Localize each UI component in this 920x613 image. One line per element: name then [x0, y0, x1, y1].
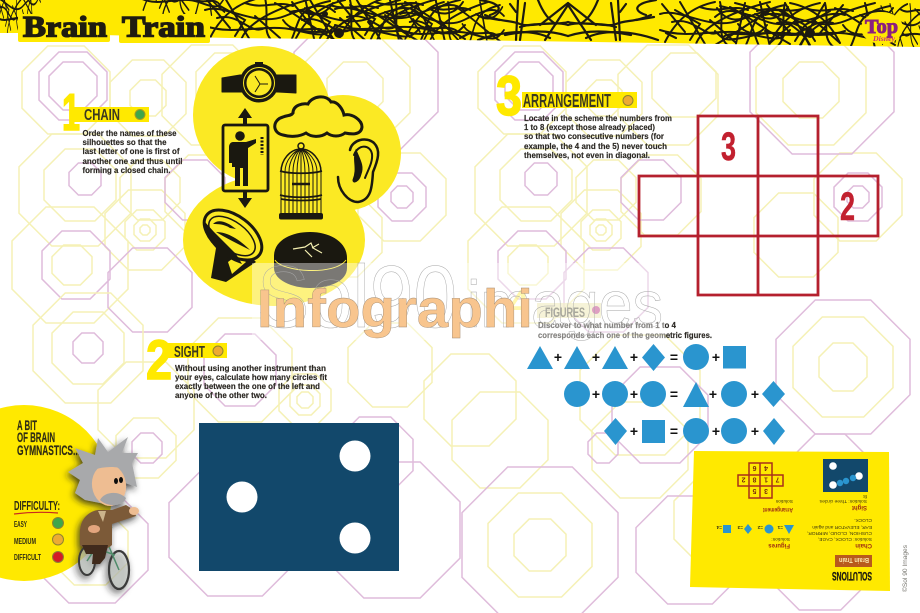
- chain instructions: last letter of one is first of: [82, 146, 180, 156]
- copyright: ©Sol 90 Images: [901, 544, 909, 592]
- icon: cloud: [275, 97, 362, 136]
- sight solution: [819, 459, 868, 510]
- chain instructions: Order the names of these: [82, 128, 177, 138]
- panel: upside-down solutions: [690, 451, 890, 591]
- arrangement solution: Arrangement: [763, 506, 793, 512]
- chain instructions: [82, 128, 182, 175]
- difficulty legend: EASY: [14, 520, 27, 529]
- header band with scribbles: [0, 0, 920, 49]
- chain solution: Chain: [855, 542, 872, 548]
- arrangement solution: 6: [752, 464, 756, 471]
- heading bar: arrangement: ARRANGEMENT: [523, 91, 611, 111]
- sight puzzle: blue panel with circles: [199, 423, 399, 571]
- grid number 2: 2: [840, 185, 855, 229]
- equation row 1: +: [592, 349, 600, 365]
- equation row 1: +: [554, 349, 562, 365]
- number 3: 3: [496, 64, 522, 127]
- arrangement solution: 7: [775, 476, 779, 482]
- arrangement instructions: [524, 113, 672, 160]
- chain solution: CLOCK.: [854, 517, 872, 523]
- arrangement solution: Solution: [775, 498, 793, 504]
- yellow blob behind silhouettes: [183, 46, 401, 306]
- character: Einstein on a bicycle: [68, 437, 139, 589]
- watermark: Infographi: [257, 279, 533, 339]
- equation row 3: =: [670, 423, 678, 439]
- icon: wristwatch: [222, 62, 296, 102]
- arrangement solution: 3: [764, 487, 768, 494]
- arrangement solution: 4: [764, 464, 768, 471]
- equation row 1: =: [670, 349, 678, 365]
- equation row 1: +: [712, 349, 720, 365]
- figures instructions: corresponds each one of the geometric figures.: [538, 330, 712, 340]
- logo: Top Disney: [861, 12, 903, 44]
- panel: sight heading and text: [146, 328, 327, 400]
- brain train label: [835, 555, 872, 567]
- grid number 3: 3: [721, 125, 736, 169]
- difficulty legend: MEDIUM: [14, 537, 36, 546]
- arrangement solution: 5: [752, 487, 756, 494]
- side title: GYMNASTICS...: [17, 442, 80, 458]
- equation row 3: +: [712, 423, 720, 439]
- figures solution: [716, 524, 794, 548]
- equation row 3: [604, 418, 785, 445]
- heading bar: figures: FIGURES: [545, 304, 585, 320]
- equation row 3: +: [751, 423, 759, 439]
- brain train label: Brain Train: [839, 556, 869, 565]
- equation row 2: +: [709, 386, 717, 402]
- equation row 3: +: [630, 423, 638, 439]
- arrangement instructions: so that two consecutive numbers (for: [524, 131, 665, 141]
- sight instructions: your eyes, calculate how many circles fit: [175, 372, 327, 382]
- side title: OF BRAIN: [17, 429, 55, 445]
- background octagon pattern: [12, 10, 446, 332]
- sight instructions: Without using another instrument than: [175, 363, 326, 373]
- equation row 2: [564, 381, 785, 407]
- watermark: [252, 247, 665, 346]
- figures solution: =4: [716, 524, 722, 530]
- title: Brain: [23, 10, 107, 44]
- icon: mirror: [195, 200, 271, 282]
- figures solution: Figures: [768, 542, 790, 548]
- logo: Top Disney: Disney: [872, 34, 896, 43]
- number 2: 2: [146, 328, 172, 391]
- sight instructions: exactly between the one of the left and: [175, 381, 320, 391]
- arrangement instructions: themselves, not even in diagonal.: [524, 150, 650, 160]
- equation row 1: [527, 344, 746, 371]
- heading bar: sight: SIGHT: [174, 344, 205, 361]
- difficulty legend: DIFFICULTY:: [14, 498, 60, 513]
- difficulty legend: [14, 498, 64, 562]
- panel: figures heading and text: [509, 282, 712, 340]
- chain instructions: forming a closed chain.: [82, 165, 170, 175]
- sight instructions: anyone of the other two.: [175, 390, 267, 400]
- figures puzzle equations: [527, 344, 785, 445]
- watermark: Sol90: [257, 247, 457, 346]
- sight instructions: [175, 363, 327, 400]
- logo: Top Disney: Top: [865, 16, 898, 38]
- watermark: images: [467, 267, 663, 341]
- arrangement solution: 1: [764, 476, 768, 482]
- number 4, washed out: 4: [509, 282, 529, 323]
- sight solution: Sight: [852, 504, 867, 510]
- figures instructions: [538, 320, 712, 340]
- arrangement solution: 8: [752, 476, 756, 482]
- arrangement instructions: Locate in the scheme the numbers from: [524, 113, 672, 123]
- icon: elevator: [223, 108, 268, 208]
- difficulty legend: DIFFICULT: [14, 553, 41, 562]
- chain instructions: another one and thus until: [82, 156, 182, 166]
- equation row 2: +: [630, 386, 638, 402]
- figures solution: Solution:: [771, 536, 790, 542]
- title: Train: [122, 10, 205, 44]
- icon: birdcage: [279, 143, 323, 220]
- side title: [17, 417, 80, 458]
- equation row 2: +: [751, 386, 759, 402]
- chain solution: EAR, ELEVATOR and again: [812, 524, 872, 530]
- chain solution: [807, 517, 872, 548]
- number 1: 1: [62, 84, 80, 142]
- number grid: [639, 116, 878, 295]
- figures instructions: Discover to what number from 1 to 4: [538, 320, 676, 330]
- arrangement instructions: 1 to 8 (except those already placed): [524, 122, 655, 132]
- solutions heading: SOLUTIONS: [832, 569, 872, 583]
- side title: A BIT: [17, 417, 37, 433]
- figures solution: =3: [737, 524, 743, 530]
- yellow circle: gymnastics and difficulty legend: [0, 405, 112, 581]
- figures solution: =1: [777, 524, 783, 530]
- panel: arrangement heading and text: [496, 64, 672, 160]
- icon: hockey puck cushion: [274, 232, 347, 288]
- equation row 1: +: [630, 349, 638, 365]
- chain solution: Solution: CLOCK, CAGE,: [818, 536, 872, 542]
- icon: ear: [338, 139, 378, 202]
- figures solution: =2: [757, 524, 763, 530]
- sight solution: Solution: Three circles: [819, 498, 867, 504]
- arrangement solution: [738, 463, 793, 512]
- equation row 2: +: [592, 386, 600, 402]
- equation row 2: =: [670, 386, 678, 402]
- panel: chain puzzle heading and text: [62, 84, 182, 175]
- chain solution: CUSHION, CLOUD, MIRROR,: [807, 530, 872, 536]
- heading bar: chain: CHAIN: [84, 107, 120, 124]
- arrangement solution: 2: [741, 476, 745, 482]
- arrangement instructions: example, the 4 and the 5) never touch: [524, 141, 667, 151]
- sight solution: fit: [863, 493, 867, 499]
- chain instructions: silhouettes so that the: [82, 137, 167, 147]
- title: [18, 10, 210, 44]
